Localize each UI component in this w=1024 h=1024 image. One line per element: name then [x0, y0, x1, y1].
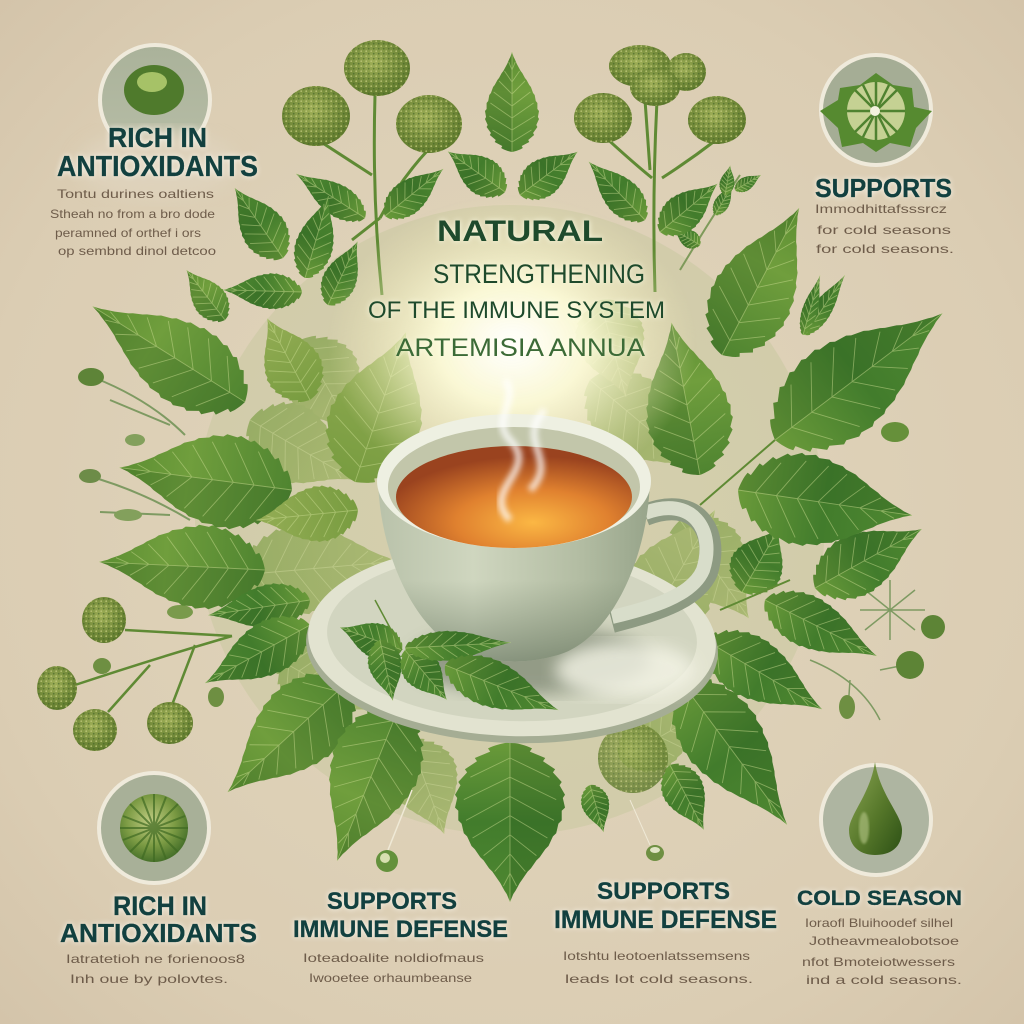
left flower cluster [37, 597, 232, 751]
panel: bottom supports immune defense 1: Iwooetee orhaumbeanse [309, 971, 472, 985]
panel: bottom-right cold season: nfot Bmoteiotwessers [802, 955, 955, 969]
leaves: bottom cluster [199, 649, 819, 902]
heading: RICH IN [113, 891, 207, 921]
cup [377, 380, 710, 662]
right sprigs and berries [810, 422, 945, 720]
title block [368, 215, 665, 362]
panel: bottom-left rich in antioxidants: ANTIOXIDANTS [60, 918, 257, 948]
leaves: right cluster [629, 189, 971, 736]
body text: Immodhittafsssrcz [815, 202, 947, 216]
panel: top-right supports [815, 55, 954, 256]
panel: top-left rich in antioxidants: peramned of orthef i ors [55, 226, 201, 240]
title line 3: OF THE IMMUNE SYSTEM [368, 297, 665, 324]
heading: COLD SEASON [797, 887, 962, 910]
glow behind title [327, 195, 697, 495]
body text: Iatratetioh ne forienoos8 [66, 952, 245, 966]
panel: bottom supports immune defense 2 [554, 878, 777, 986]
panel: bottom supports immune defense 1 [293, 888, 508, 985]
body text: Ioraofl Bluihoodef silhel [805, 916, 953, 930]
steam [501, 380, 545, 520]
hanging drops [376, 790, 664, 872]
panel: top-right supports: for cold seasons [817, 223, 951, 237]
panel: top-left rich in antioxidants: op sembnd dinol detcoo [58, 244, 216, 258]
top-left flowering branch [282, 40, 462, 295]
cup handle [612, 509, 710, 622]
faint background leaves [230, 291, 782, 846]
subtitle: ARTEMISIA ANNUA [396, 334, 645, 362]
body text: Ioteadoalite noldiofmaus [303, 951, 484, 965]
faint backing circle [195, 205, 825, 835]
panel: bottom supports immune defense 2: leads lot cold seasons. [565, 972, 753, 986]
panel: bottom-left rich in antioxidants [60, 773, 257, 986]
cup bowl [378, 480, 650, 662]
title line 1: NATURAL [437, 215, 603, 248]
leaves: left cluster [71, 272, 451, 707]
icon: green droplet [821, 762, 931, 875]
body text: Tontu durines oaltiens [57, 187, 214, 201]
panel: bottom-left rich in antioxidants: Inh oue by polovtes. [70, 972, 228, 986]
decorative seed head [598, 723, 668, 793]
title line 2: STRENGTHENING [433, 259, 645, 289]
panel: bottom supports immune defense 2: IMMUNE DEFENSE [554, 906, 777, 934]
panel: top-left rich in antioxidants: ANTIOXIDANTS [57, 151, 258, 183]
top-right flowering branch [574, 45, 746, 292]
icon: green star seed [820, 55, 932, 165]
icon: herb bud [77, 45, 237, 200]
panel: bottom-right cold season: Jotheavmealobotsoe [809, 934, 959, 948]
panel: bottom-right cold season: ind a cold seasons. [806, 973, 962, 987]
flower head [344, 40, 410, 96]
body text: Iotshtu leotoenlatssemsens [563, 949, 750, 963]
heading: RICH IN [108, 122, 207, 153]
heading: SUPPORTS [597, 878, 730, 905]
left wispy sprigs with buds [78, 368, 190, 521]
icon: green sphere [99, 773, 209, 883]
panel: top-left rich in antioxidants: Stheah no from a bro dode [50, 207, 215, 221]
tea surface [396, 446, 632, 548]
heading: SUPPORTS [815, 173, 952, 203]
top-right small sprig [670, 164, 764, 270]
saucer leaves [334, 600, 567, 732]
leaves: upper crown [173, 52, 730, 330]
panel: top-right supports: for cold seasons. [816, 242, 954, 256]
heading: SUPPORTS [327, 888, 457, 915]
panel: bottom supports immune defense 1: IMMUNE DEFENSE [293, 916, 508, 943]
panel: bottom-right cold season [797, 762, 962, 987]
panel: top-left rich in antioxidants [50, 45, 258, 258]
saucer [303, 537, 721, 750]
